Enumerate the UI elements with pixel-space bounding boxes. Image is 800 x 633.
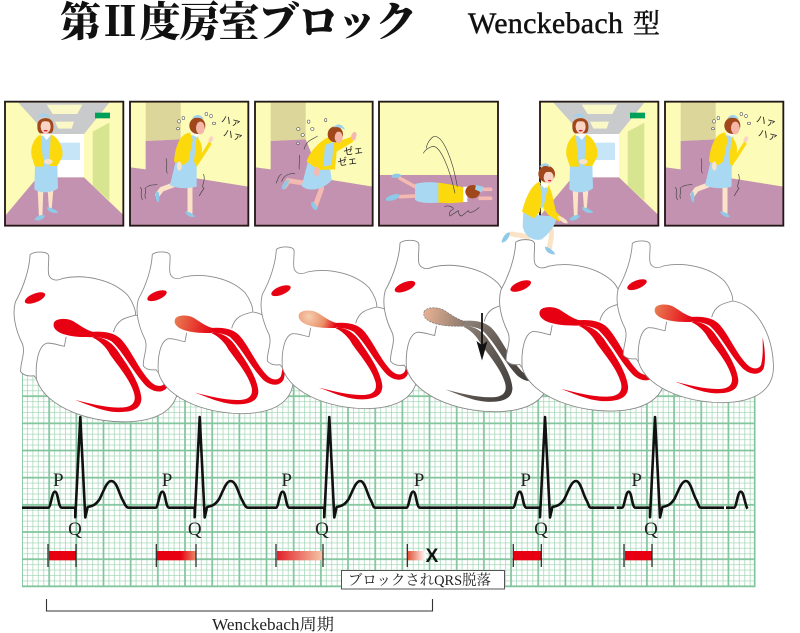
arrow: block site (476, 313, 488, 360)
callout: blocked QRS dropped: ブロックされQRS脱落 (348, 571, 491, 589)
Q wave labels: Q (315, 519, 329, 540)
dropped QRS mark: X (426, 546, 439, 567)
heart 2: slowed AV conduction (137, 252, 293, 414)
Q wave labels: Q (644, 519, 658, 540)
heart 4: conduction blocked (384, 240, 550, 412)
panel: scene 3 nurse staggering: ゼェ (343, 144, 364, 158)
subtitle: Wenckebach (468, 7, 623, 40)
panel: scene 3 nurse staggering: ゼェ (337, 154, 358, 169)
Q wave labels: Q (534, 519, 548, 540)
P wave labels: P (631, 470, 642, 491)
panel: scene 5 nurse recovered (540, 102, 658, 226)
P wave labels (53, 470, 642, 491)
panel: scene 3 nurse staggering (255, 102, 373, 226)
crouching nurse recovering (502, 163, 568, 254)
panel: scene 1 nurse standing (5, 102, 123, 226)
panel: scene 4 nurse collapsed (379, 102, 498, 226)
panel: scene 6 nurse out of breath again (665, 102, 783, 226)
panel: scene 2 nurse out of breath (130, 102, 248, 226)
P wave labels: P (281, 470, 292, 491)
Q wave labels: Q (188, 519, 202, 540)
P wave labels: P (414, 470, 424, 491)
P wave labels: P (520, 470, 531, 491)
ECG grid paper (22, 369, 755, 587)
heart 3: further slowed AV conduction (261, 247, 417, 409)
subtitle: 型 (633, 9, 660, 39)
heart 1: normal conduction (14, 252, 178, 422)
PQ interval bars (48, 544, 652, 567)
ECG trace (22, 417, 747, 518)
heart 6: slowed AV conduction (617, 241, 773, 403)
Q wave labels (68, 519, 658, 540)
Q wave labels: Q (68, 519, 82, 540)
P wave labels: P (162, 470, 172, 491)
P wave labels: P (53, 470, 64, 491)
title: 第Ⅱ度房室ブロック (60, 0, 417, 45)
heart 5: normal conduction restored (500, 240, 665, 411)
bracket: Wenckebach period (46, 599, 432, 611)
